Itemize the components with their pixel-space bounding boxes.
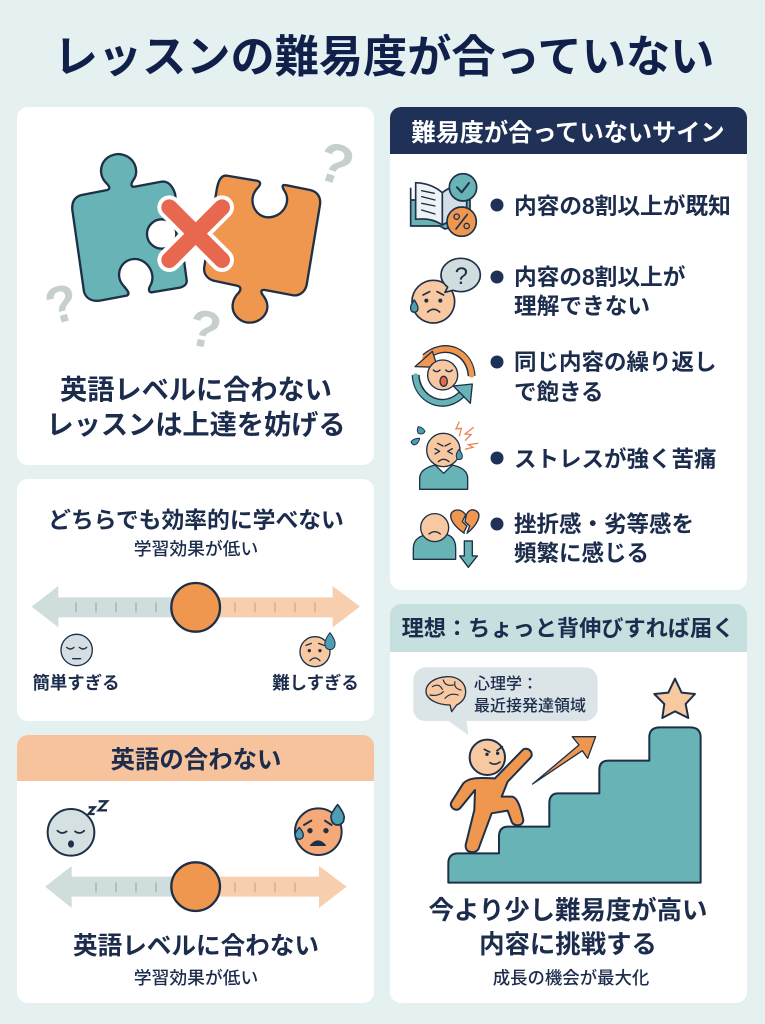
icon: confused face: ? [455, 263, 468, 290]
title: レッスンの難易度が合っていない [54, 33, 714, 82]
bullets [490, 198, 504, 530]
illustration: climbing stairs [413, 667, 701, 883]
icon: distressed face [295, 805, 344, 855]
sign 2 text [514, 264, 686, 319]
sign 2 text: 理解できない [514, 293, 650, 319]
panel caption: 英語レベルに合わない [60, 374, 332, 405]
stairs [448, 727, 701, 883]
star [654, 679, 695, 718]
panel: puzzle mismatch [17, 107, 374, 465]
subheading: 学習効果が低い [134, 538, 258, 559]
panel: ideal [390, 604, 747, 1003]
icon: question marks [39, 128, 362, 362]
sign 2 text: 内容の8割以上が [514, 264, 686, 290]
sign 5 text: 挫折感・劣等感を [514, 512, 694, 537]
sign 5 text [514, 512, 694, 566]
icon: worried face [300, 633, 335, 667]
label: too hard: 難しすぎる [272, 673, 359, 693]
sign 1 text: 内容の8割以上が既知 [514, 193, 731, 219]
speech bubble text: 最近接発達領域 [474, 697, 586, 715]
sign 3 text: 同じ内容の繰り返し [514, 350, 717, 375]
icon: sad person broken heart [413, 510, 479, 567]
panel: mismatch [17, 735, 374, 1003]
caption: 英語レベルに合わない [73, 932, 319, 960]
sign 3 text [514, 350, 717, 405]
sign 5 text: 頻繁に感じる [514, 541, 649, 566]
icon: question marks: ? [183, 298, 226, 362]
speech bubble [413, 667, 598, 735]
panel: inefficient either way [17, 479, 374, 721]
sub caption: 学習効果が低い [134, 967, 258, 988]
icon: mismatched puzzle pieces [72, 154, 320, 323]
panel: signs of mismatch [390, 107, 747, 590]
header band: 理想：ちょっと背伸びすれば届く [402, 616, 734, 641]
difficulty scale with faces [45, 801, 347, 911]
icon: question marks: ? [310, 128, 362, 199]
panel caption [46, 374, 346, 440]
icon: stressed person [411, 422, 478, 489]
header band [390, 107, 747, 154]
difficulty scale [32, 583, 360, 667]
icon: question marks: ? [39, 273, 85, 337]
caption: 内容に挑戦する [479, 931, 657, 959]
sign icons [410, 174, 480, 567]
sign 4 text: ストレスが強く苦痛 [514, 446, 717, 472]
heading: どちらでも効率的に学べない [48, 507, 344, 533]
climbing figure [451, 740, 532, 852]
panel caption: レッスンは上達を妨げる [46, 409, 346, 440]
caption [429, 896, 707, 959]
icon: brain [426, 677, 466, 712]
speech bubble text: 心理学： [474, 675, 538, 693]
header band [17, 735, 374, 781]
sign 3 text: で飽きる [514, 380, 604, 405]
header band [390, 604, 747, 652]
header band: 英語の合わない [111, 747, 281, 774]
icon: bored face [61, 634, 92, 666]
label: too easy: 簡単すぎる [33, 673, 119, 693]
sub caption: 成長の機会が最大化 [493, 968, 649, 988]
caption: 今より少し難易度が高い [429, 896, 707, 925]
icon: book with check and percent [411, 174, 477, 236]
header band: 難易度が合っていないサイン [411, 119, 725, 147]
icon: repeat cycle yawning [415, 349, 472, 403]
arrow up [533, 737, 596, 784]
icon: sleeping face [48, 801, 107, 856]
icon: confused face [410, 258, 480, 323]
speech bubble text [474, 675, 586, 715]
